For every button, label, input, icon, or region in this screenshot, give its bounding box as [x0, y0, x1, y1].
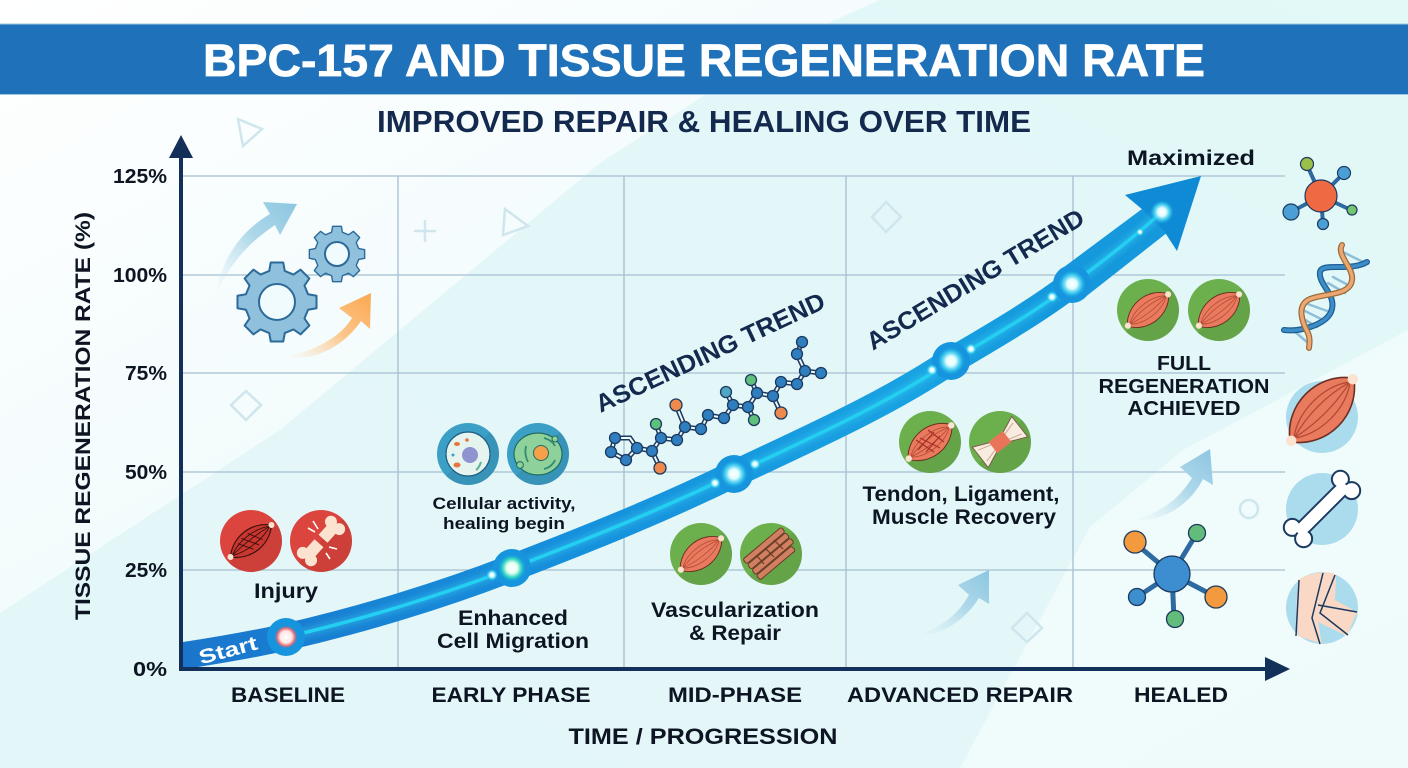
rising curve arrow [181, 176, 1201, 656]
icon: ligament circle [1286, 572, 1358, 644]
label: cellular activity: Cellular activity, [432, 494, 576, 513]
y axis tick labels: 25% [125, 560, 167, 582]
x axis labels: HEALED [1134, 684, 1228, 707]
label: full regeneration achieved: ACHIEVED [1128, 398, 1240, 420]
long peptide molecule [606, 336, 826, 474]
icons: cells [437, 423, 569, 485]
y axis tick labels: 100% [113, 265, 167, 287]
icon: DNA helix [1284, 245, 1367, 348]
label: full regeneration achieved [1098, 353, 1270, 420]
icon: muscle circle [1264, 356, 1380, 464]
label: full regeneration achieved: REGENERATION [1098, 376, 1270, 398]
icons: vascularization [670, 523, 802, 585]
icon: large blue molecule [1124, 524, 1227, 628]
label: cellular activity: healing begin [443, 514, 565, 533]
chart grid [181, 176, 1285, 669]
label: enhanced cell migration [437, 607, 589, 653]
label: vascularization [651, 599, 819, 645]
arrow: faded blue right [1133, 449, 1213, 520]
label: tendon ligament muscle: Tendon, Ligament, [862, 483, 1060, 506]
icon: bone circle [1280, 467, 1364, 551]
icons: tendon and ligament [897, 411, 1031, 473]
label: tendon ligament muscle: Muscle Recovery [872, 506, 1056, 529]
subtitle: IMPROVED REPAIR & HEALING OVER TIME [377, 104, 1031, 139]
arrowhead [1125, 176, 1201, 251]
x axis labels: ADVANCED REPAIR [847, 684, 1073, 707]
label: vascularization: & Repair [689, 622, 781, 645]
label: full regeneration achieved: FULL [1157, 353, 1211, 375]
curve nodes [267, 200, 1174, 656]
inner glow line [286, 212, 1162, 637]
icon: top molecule [1283, 158, 1357, 230]
axes [169, 135, 1290, 681]
label: cellular activity [432, 494, 576, 533]
label: injury: Injury [254, 580, 318, 603]
gears icon [237, 226, 365, 342]
y axis title: TISSUE REGENERATION RATE (%) [72, 212, 95, 620]
decorative faint shapes [231, 119, 1258, 642]
icons: injury [220, 510, 352, 572]
title banner [0, 24, 1408, 94]
arrow: faded orange [287, 293, 371, 358]
arrow: faded blue mid [918, 570, 989, 635]
label: vascularization: Vascularization [651, 599, 819, 622]
title: BPC-157 AND TISSUE REGENERATION RATE [203, 35, 1205, 86]
label: enhanced cell migration: Enhanced [458, 607, 568, 630]
x axis labels: BASELINE [231, 684, 345, 707]
y axis tick labels: 75% [125, 363, 167, 385]
y axis tick labels: 50% [125, 462, 167, 484]
label: maximized: Maximized [1127, 147, 1255, 170]
label: enhanced cell migration: Cell Migration [437, 630, 589, 653]
y axis tick labels: 125% [113, 166, 167, 188]
trend label 2: ASCENDING TREND [862, 204, 1089, 356]
x axis labels [231, 684, 1228, 707]
x axis title: TIME / PROGRESSION [568, 724, 838, 749]
trend label 1: ASCENDING TREND [591, 287, 830, 418]
icons: full regeneration [1117, 279, 1250, 341]
x axis labels: EARLY PHASE [432, 684, 590, 707]
y axis tick labels [113, 166, 167, 681]
start label: Start [196, 632, 261, 669]
y axis tick labels: 0% [133, 659, 167, 681]
x axis labels: MID-PHASE [668, 684, 802, 707]
label: tendon ligament muscle [862, 483, 1060, 529]
arrow: faded blue [215, 202, 297, 297]
